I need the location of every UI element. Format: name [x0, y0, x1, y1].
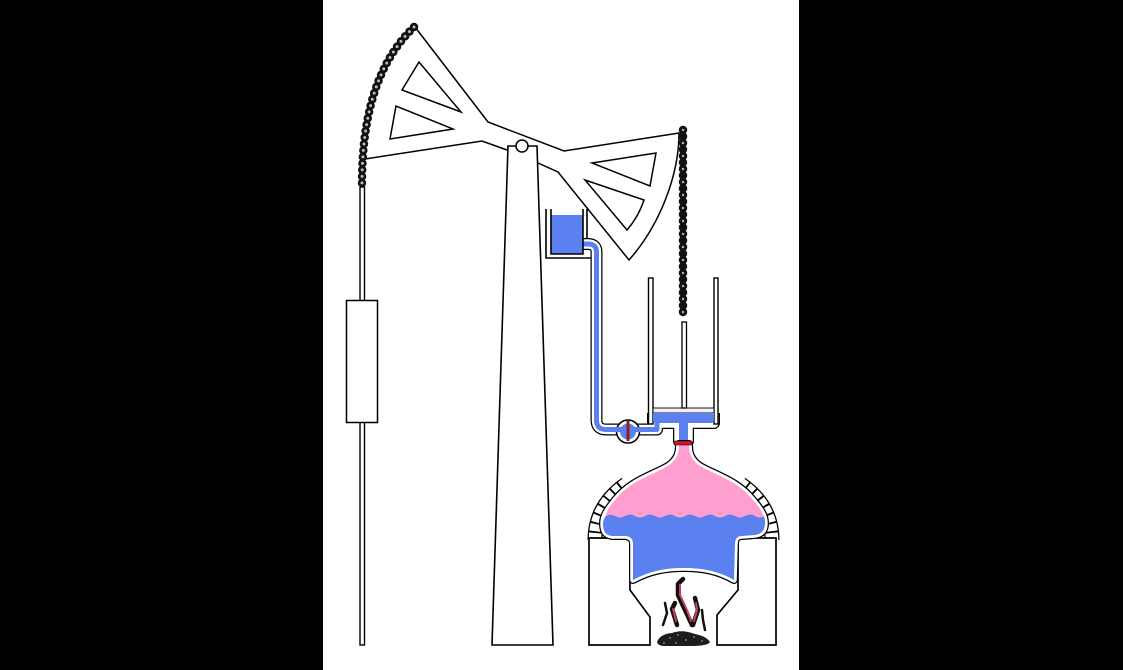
beam cutout: upper right — [592, 153, 656, 186]
boiler brickwork — [595, 484, 772, 540]
pipe water — [583, 244, 657, 430]
counterweight — [346, 300, 378, 422]
valve handle — [626, 421, 630, 441]
beam cutout: lower left — [390, 106, 453, 139]
white page panel — [323, 0, 799, 670]
beam cutout: upper left — [402, 62, 461, 112]
thin outer flames — [663, 603, 705, 630]
piston and water in cylinder — [653, 408, 714, 441]
coals — [657, 631, 710, 646]
boiler water — [603, 514, 765, 580]
flames core — [673, 585, 697, 621]
furnace right block — [717, 538, 776, 645]
boiler — [603, 444, 765, 580]
valve body — [616, 420, 640, 443]
steam — [605, 444, 764, 518]
cistern — [546, 209, 591, 258]
tower — [492, 146, 553, 645]
rocking beam — [365, 27, 679, 260]
flames outline — [672, 579, 698, 625]
pivot — [516, 140, 528, 152]
right chain — [679, 130, 687, 318]
water supply pipe, cylinder base and neck — [583, 244, 714, 443]
left chain — [362, 27, 414, 184]
boiler valve — [674, 441, 692, 445]
beam cutout: lower right — [585, 180, 644, 230]
cylinder walls — [648, 278, 718, 424]
pump rod — [360, 187, 364, 645]
furnace left block — [589, 538, 650, 645]
piston rod — [682, 322, 686, 408]
fire — [663, 579, 705, 630]
